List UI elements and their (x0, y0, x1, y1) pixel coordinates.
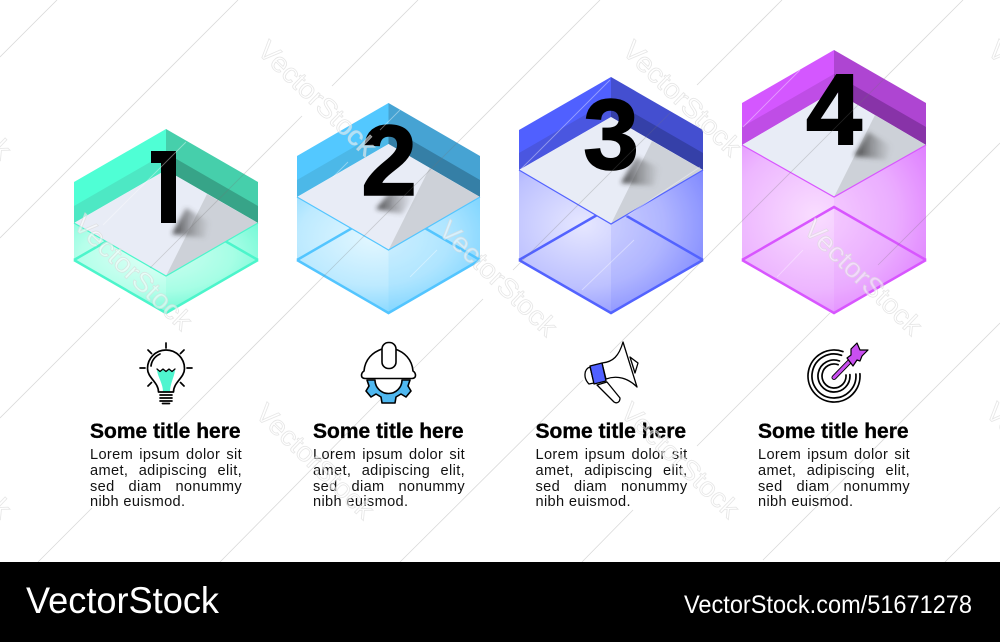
hexagon 2: blue (297, 103, 480, 313)
body 3: amet, adipiscing elit, (536, 463, 688, 479)
number 2: 2 (361, 105, 417, 217)
body 4: Lorem ipsum dolor sit (758, 447, 910, 463)
body 1: nibh euismod. (90, 494, 185, 510)
watermark: VectorStock (798, 214, 928, 341)
body 2 (313, 447, 465, 510)
footer bar (0, 562, 1000, 642)
body 4 (758, 447, 910, 510)
icon: helmet and gear (362, 342, 416, 403)
body 1: amet, adipiscing elit, (90, 463, 242, 479)
body 2: nibh euismod. (313, 494, 408, 510)
body 4: nibh euismod. (758, 494, 853, 510)
icon: target with arrow (808, 343, 868, 402)
text block 4 (758, 420, 910, 510)
hexagon 1: teal (74, 129, 258, 313)
body 1 (90, 447, 242, 510)
watermark: VectorStock (433, 215, 563, 342)
watermark: VectorStock (250, 398, 380, 525)
title 1: Some title here (90, 420, 241, 443)
body 1: sed diam nonummy (90, 479, 242, 495)
footer brand: VectorStock (26, 580, 219, 621)
text block 1 (90, 420, 242, 510)
number 3: 3 (583, 79, 639, 191)
watermark: VectorStock (617, 35, 747, 162)
body 2: amet, adipiscing elit, (313, 463, 465, 479)
body 4: sed diam nonummy (758, 479, 910, 495)
hexagon 4: magenta (742, 50, 926, 313)
number 1: 1 (135, 133, 191, 245)
icon: light bulb (140, 343, 192, 404)
body 2: Lorem ipsum dolor sit (313, 447, 465, 463)
body 3: Lorem ipsum dolor sit (536, 447, 688, 463)
title 4: Some title here (758, 420, 909, 443)
text block 2 (313, 420, 465, 510)
title 3: Some title here (536, 420, 686, 443)
body 3 (536, 447, 688, 510)
body 2: sed diam nonummy (313, 479, 465, 495)
watermark: VectorStock (68, 209, 198, 336)
number 1 (151, 151, 176, 223)
body 1: Lorem ipsum dolor sit (90, 447, 242, 463)
footer image id: VectorStock.com/51671278 (684, 591, 972, 619)
icon: megaphone (585, 342, 638, 403)
number 4: 4 (806, 54, 862, 166)
hexagon 3: indigo (519, 77, 703, 313)
body 3: sed diam nonummy (536, 479, 688, 495)
body 3: nibh euismod. (536, 494, 631, 510)
text block 3 (536, 420, 688, 510)
title 2: Some title here (313, 420, 464, 443)
body 4: amet, adipiscing elit, (758, 463, 910, 479)
watermark: VectorStock (615, 397, 745, 524)
watermark: VectorStock (252, 35, 382, 162)
